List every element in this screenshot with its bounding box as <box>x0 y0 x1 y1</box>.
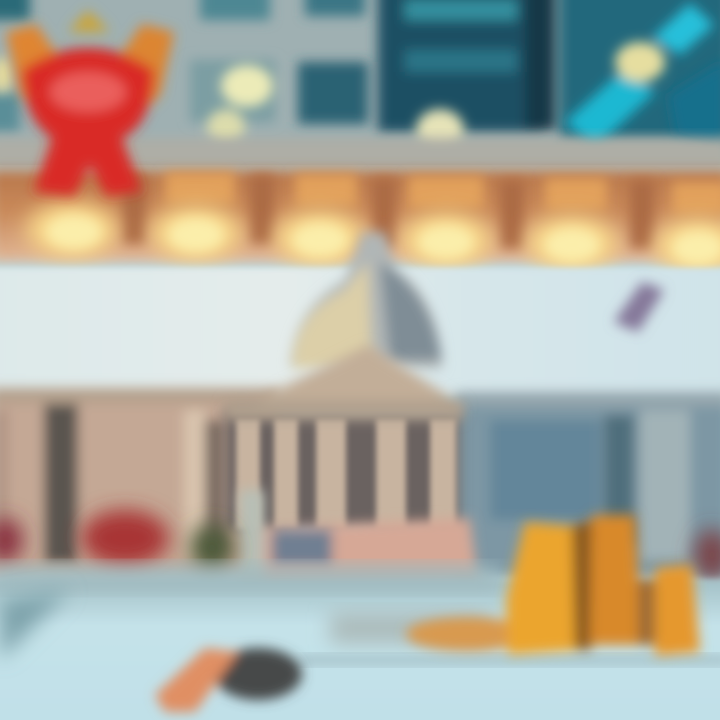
icon: cyan diagonal marker <box>565 3 720 150</box>
panel: stone ledge <box>0 138 720 170</box>
steps <box>240 490 478 590</box>
icon: orange and dark object <box>155 648 302 712</box>
panel: pale wall band <box>0 268 720 396</box>
panel: capitol building <box>0 232 720 590</box>
panel: upper window grid <box>0 0 720 165</box>
icon: flag <box>614 282 664 332</box>
shrubs <box>0 510 720 581</box>
lights row <box>26 202 720 274</box>
pale yellow lights <box>0 57 464 151</box>
pediment <box>225 345 468 420</box>
dome <box>290 232 442 368</box>
icon: stack of gold coins <box>406 515 700 656</box>
panel: orange band with lights <box>0 170 720 274</box>
panel: foreground surface <box>0 566 720 720</box>
left wing <box>0 388 280 575</box>
portico columns <box>225 410 460 530</box>
icon: red mascot <box>6 10 174 196</box>
right wing <box>455 392 720 576</box>
